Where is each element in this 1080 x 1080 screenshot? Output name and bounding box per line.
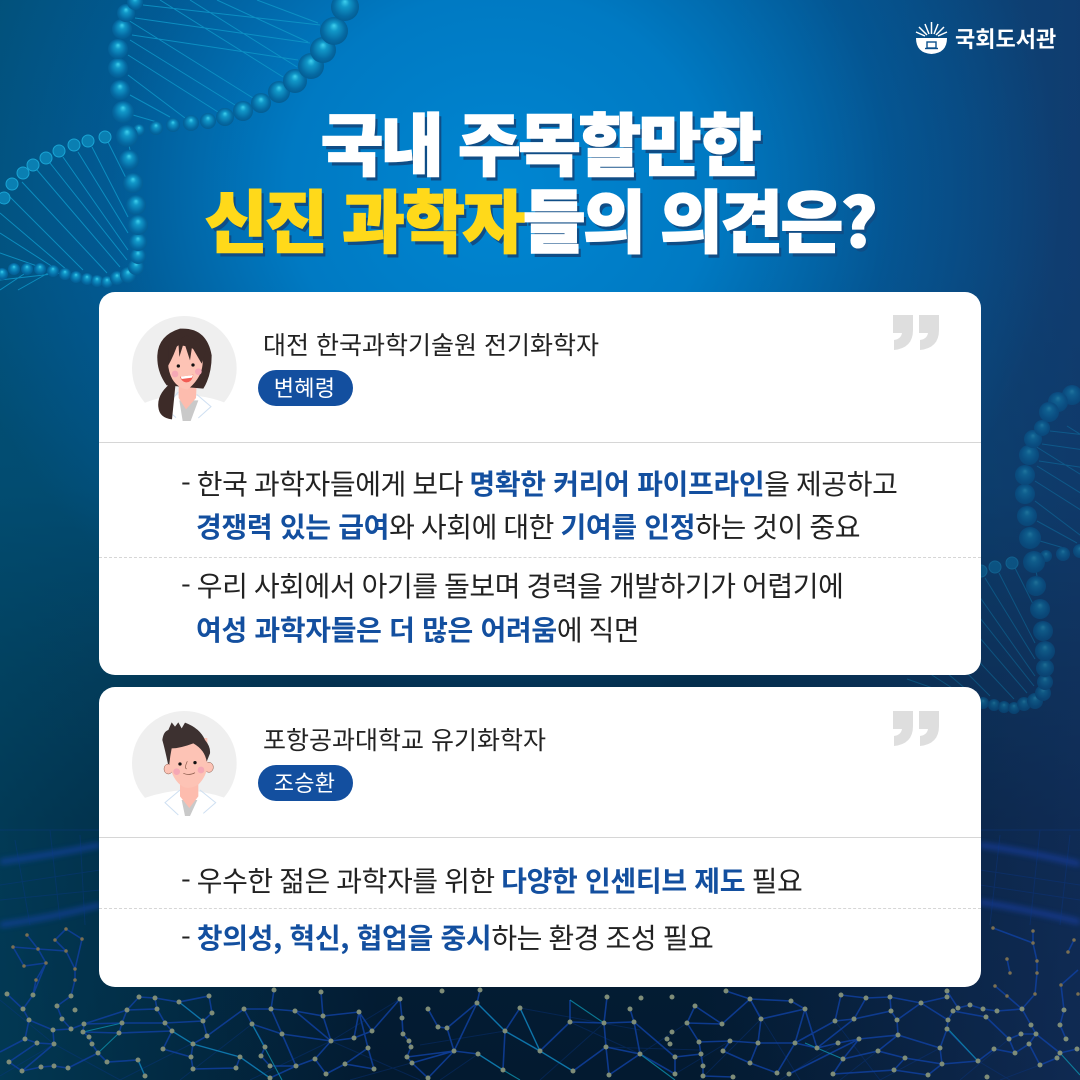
- opinion 1 continuation: 경쟁력 있는 급여와 사회에 대한 기여를 인정하는 것이 중요: [196, 506, 860, 546]
- name badge: [258, 370, 353, 406]
- name badge: 조승환: [274, 766, 335, 798]
- opinion 2 continuation: 여성 과학자들은 더 많은 어려움에 직면: [196, 609, 639, 649]
- panel: scientist 2: [99, 687, 981, 987]
- logo: National Assembly Library: [916, 22, 1056, 54]
- opinion 2: - 창의성, 혁신, 협업을 중시하는 환경 조성 필요: [181, 917, 713, 957]
- avatar: male scientist: [132, 711, 236, 816]
- avatar: female scientist: [132, 316, 236, 421]
- opinion 2: - 우리 사회에서 아기를 돌보며 경력을 개발하기가 어렵기에: [181, 565, 843, 605]
- name badge: 변혜령: [274, 371, 335, 403]
- DNA helix: right side: [903, 385, 1080, 716]
- title: 신진 과학자들의 의견은?: [205, 168, 875, 267]
- title: [205, 91, 877, 267]
- DNA helix: upper left: [0, 0, 359, 290]
- organization label: 대전 한국과학기술원 전기화학자: [263, 326, 599, 362]
- title: 국내 주목할만한: [321, 91, 759, 190]
- name badge: [258, 765, 353, 801]
- icon: quotation mark: [893, 315, 939, 350]
- icon: quotation mark: [893, 711, 939, 746]
- opinion 1: - 우수한 젊은 과학자를 위한 다양한 인센티브 제도 필요: [181, 860, 802, 900]
- opinion 1: - 한국 과학자들에게 보다 명확한 커리어 파이프라인을 제공하고: [181, 463, 897, 503]
- organization label: 포항공과대학교 유기화학자: [263, 721, 546, 757]
- logo wordmark: 국회도서관: [955, 22, 1056, 54]
- icon: open book with rays: [916, 22, 948, 54]
- panel: scientist 1: [99, 292, 981, 675]
